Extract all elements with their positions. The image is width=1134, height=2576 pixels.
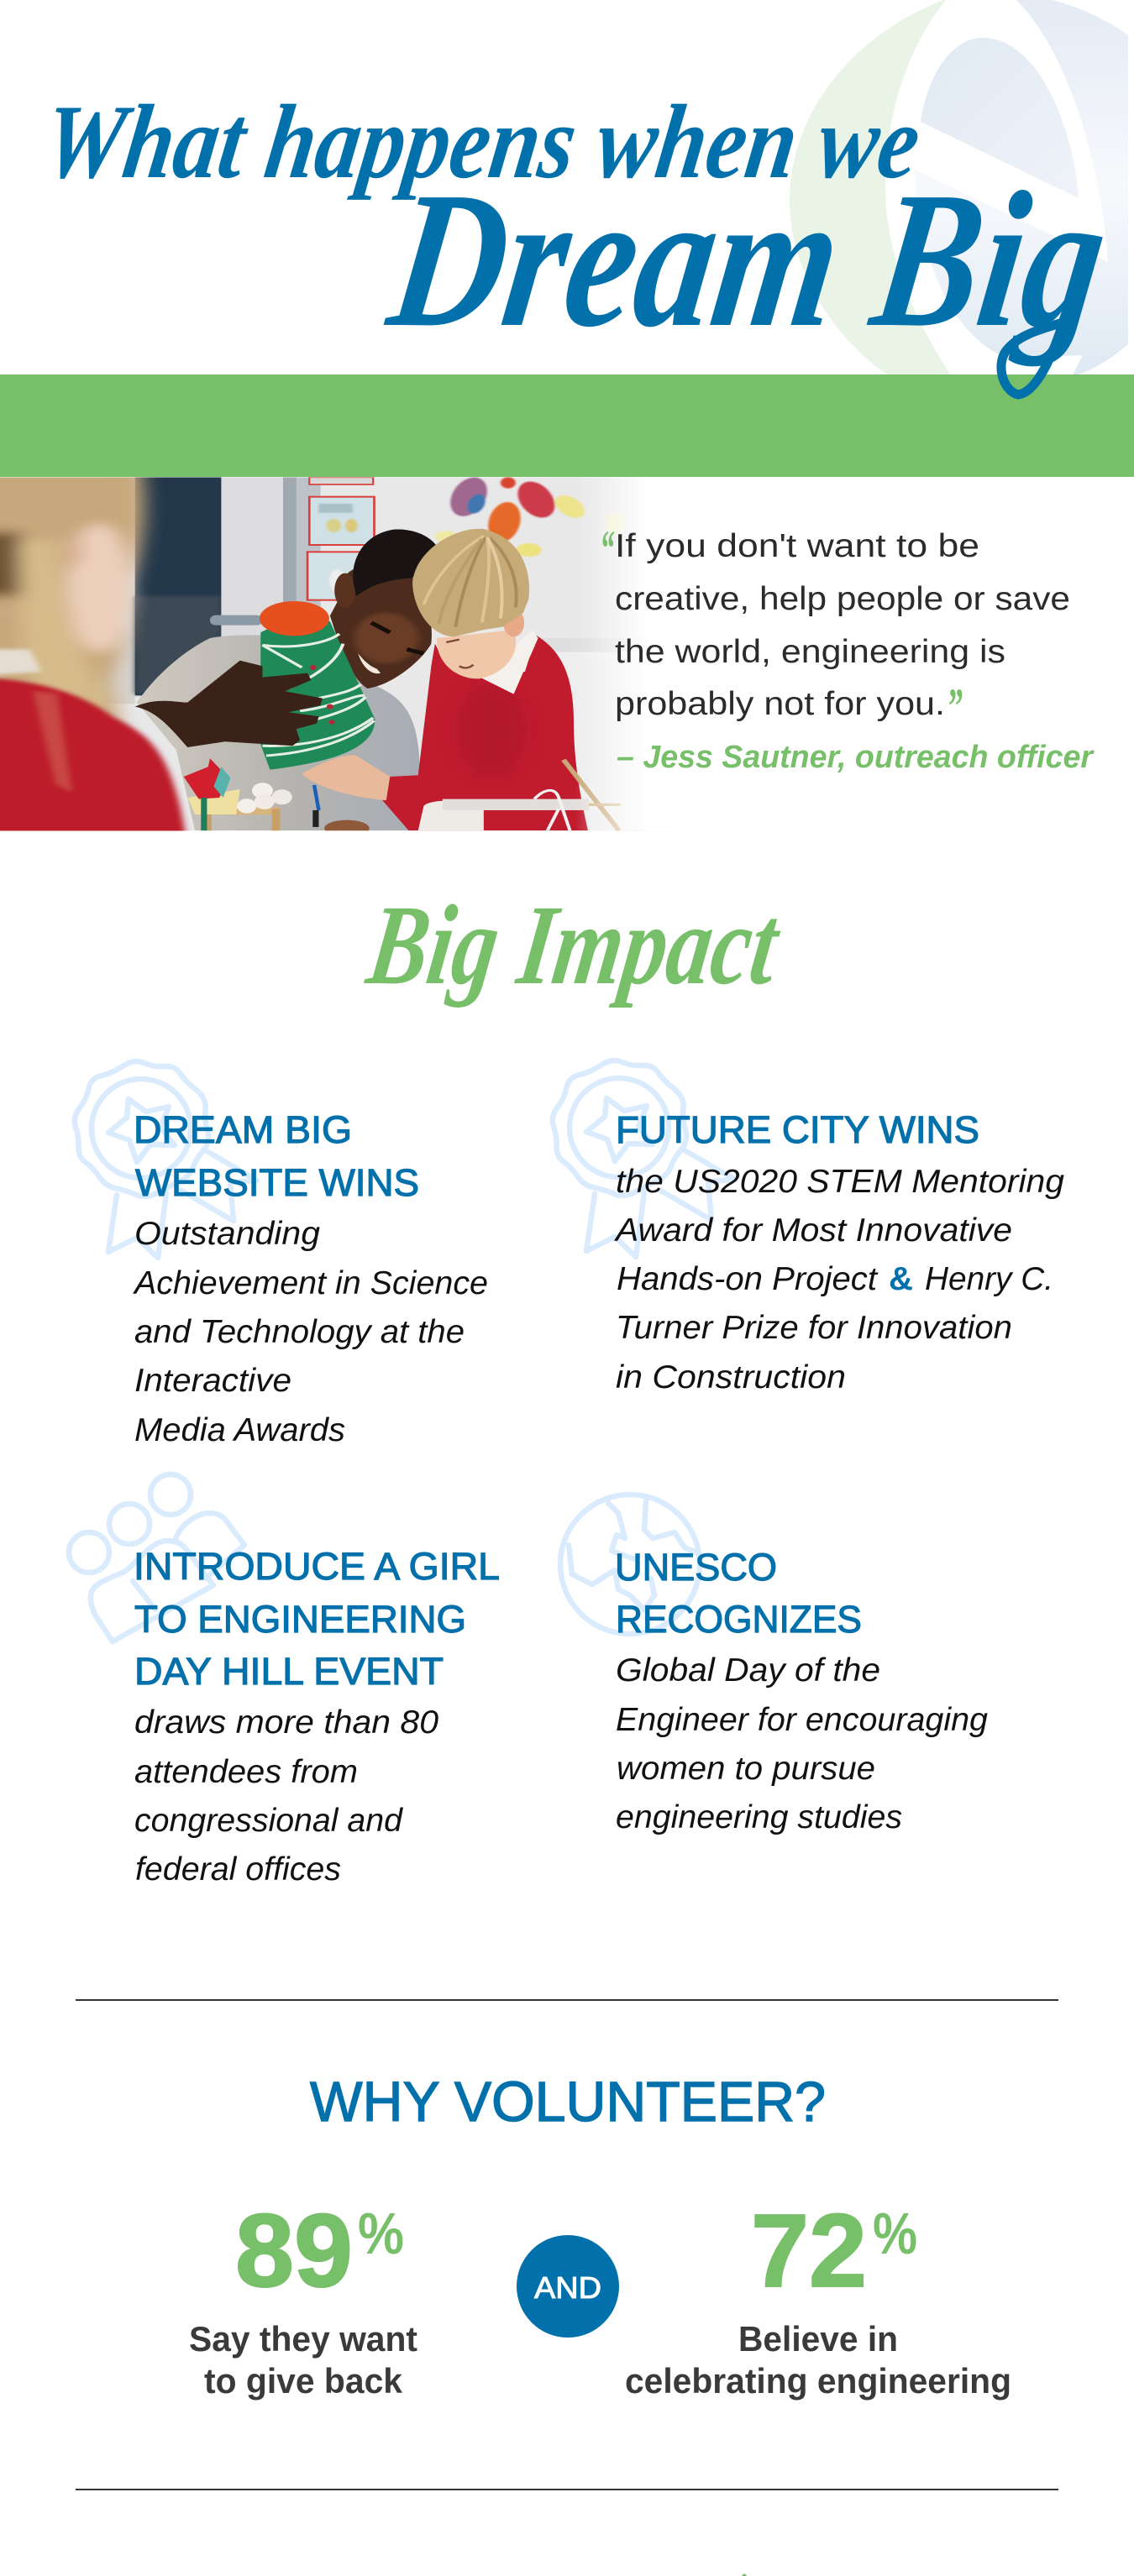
text block: Introduce a Girl to Engineering Day: congressional and <box>134 1803 403 1839</box>
text block: UNESCO recognizes: engineering studies <box>616 1799 902 1835</box>
title <box>37 84 1119 395</box>
heading: Why Volunteer: WHY VOLUNTEER? <box>310 2071 826 2134</box>
quote: If you don't want to be <box>615 528 979 564</box>
text block: Introduce a Girl to Engineering Day <box>134 1545 500 1887</box>
quote: ” <box>948 678 963 734</box>
quote: – Jess Sautner, outreach officer <box>617 740 1095 775</box>
quote: the world, engineering is <box>615 634 1005 670</box>
logo watermark <box>790 0 1128 374</box>
AND badge: AND <box>534 2270 601 2305</box>
text block: Future City wins: FUTURE CITY WINS <box>616 1108 979 1151</box>
text block: Introduce a Girl to Engineering Day: draws more than 80 <box>134 1704 438 1741</box>
stat: 72 percent: celebrating engineering <box>625 2361 1011 2401</box>
text block: UNESCO recognizes: UNESCO <box>615 1546 777 1589</box>
stat: 72 percent: % <box>873 2201 917 2266</box>
text block: Dream Big website wins: Media Awards <box>134 1412 345 1448</box>
text block: Future City wins: & <box>889 1261 913 1297</box>
text block: Introduce a Girl to Engineering Day: INTRODUCE A GIRL <box>134 1545 500 1588</box>
stat: 72 percent: 72 <box>751 2194 867 2309</box>
text block: Dream Big website wins: Interactive <box>134 1363 291 1399</box>
icon: group of people <box>69 1474 244 1641</box>
text block: Introduce a Girl to Engineering Day: attendees from <box>134 1754 358 1790</box>
icon: award ribbon, left <box>75 1061 257 1258</box>
text block: Dream Big website wins: and Technology at the <box>134 1314 465 1350</box>
title: What happens when we <box>37 84 927 201</box>
text block: Introduce a Girl to Engineering Day: TO ENGINEERING <box>134 1598 466 1641</box>
quote: creative, help people or save <box>615 581 1070 617</box>
stat: 89 percent: % <box>358 2201 404 2266</box>
text block: Dream Big website wins: Outstanding <box>134 1216 320 1252</box>
green banner <box>0 374 1134 477</box>
heading: Big Impact: Big Impact <box>360 882 788 1008</box>
text block: Dream Big website wins: Achievement in Science <box>133 1265 488 1301</box>
stat: 72 percent <box>625 2194 1011 2401</box>
next section icon tip <box>742 2573 747 2576</box>
text block: Introduce a Girl to Engineering Day: DAY HILL EVENT <box>134 1650 444 1693</box>
text block: Future City wins: Hands-on Project <box>617 1261 879 1297</box>
text block: Dream Big website wins: DREAM BIG <box>134 1108 352 1151</box>
stat: 72 percent: Believe in <box>738 2319 898 2359</box>
stat: 89 percent: 89 <box>235 2194 353 2309</box>
text block: Future City wins: in Construction <box>616 1359 846 1395</box>
AND badge <box>517 2235 619 2338</box>
quote: “ <box>601 521 615 576</box>
text block: UNESCO recognizes: Global Day of the <box>616 1652 880 1689</box>
quote <box>601 521 1095 775</box>
text block: UNESCO recognizes: RECOGNIZES <box>616 1598 862 1641</box>
text block: UNESCO recognizes: Engineer for encouraging <box>616 1702 988 1738</box>
text block: Future City wins: Turner Prize for Innovation <box>616 1310 1012 1346</box>
stat: 89 percent: Say they want <box>189 2319 417 2359</box>
text block: Future City wins <box>614 1108 1064 1395</box>
text block: Future City wins: Henry C. <box>925 1261 1053 1297</box>
text block: Introduce a Girl to Engineering Day: federal offices <box>135 1851 341 1887</box>
icon: award ribbon, right <box>553 1060 735 1257</box>
text block: UNESCO recognizes: women to pursue <box>617 1751 875 1787</box>
text block: Future City wins: Award for Most Innovative <box>614 1212 1012 1249</box>
icon: globe <box>560 1495 700 1634</box>
text block: Future City wins: the US2020 STEM Mentoring <box>616 1164 1064 1200</box>
photo: engineer with schoolchildren <box>0 477 675 831</box>
stat: 89 percent: to give back <box>204 2361 403 2401</box>
text block: Dream Big website wins: WEBSITE WINS <box>135 1161 419 1204</box>
quote: probably not for you. <box>615 686 945 722</box>
text block: Dream Big website wins <box>133 1108 488 1448</box>
text block: UNESCO recognizes <box>615 1546 988 1835</box>
stat: 89 percent <box>189 2194 417 2401</box>
